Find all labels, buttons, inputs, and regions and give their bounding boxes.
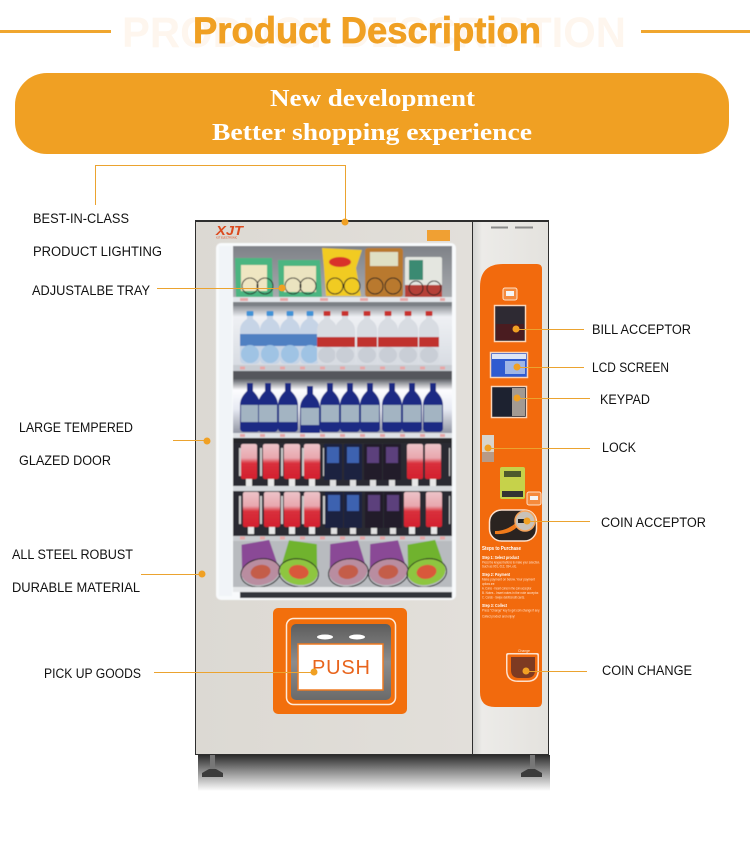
callout: tempered glass door xyxy=(19,420,210,468)
label: PICK UP GOODS xyxy=(44,666,141,681)
machine floor shadow xyxy=(198,755,550,791)
shelf tray 2 xyxy=(233,365,452,379)
label: BEST-IN-CLASS xyxy=(33,211,129,226)
callout: best-in-class lighting xyxy=(33,166,348,259)
shelf row 4: cans xyxy=(233,443,452,487)
machine foot right xyxy=(521,755,542,777)
callout: pick up goods xyxy=(44,666,318,681)
step 1: Step 1: Select product xyxy=(482,555,519,560)
coin acceptor xyxy=(490,510,536,541)
label: COIN ACCEPTOR xyxy=(601,515,706,530)
shelf row 6: noodle cups xyxy=(233,539,452,590)
step 2 xyxy=(482,572,539,600)
heading: watermark: PRODUCT DESCRIPTION xyxy=(122,9,626,57)
banner xyxy=(15,73,729,154)
step 1 xyxy=(482,555,540,568)
logo: XJT xyxy=(215,223,244,238)
pickup lights xyxy=(317,634,365,640)
label: COIN CHANGE xyxy=(602,663,692,678)
push flap xyxy=(298,644,383,690)
step 2: Step 2: Payment xyxy=(482,572,511,577)
warning sticker xyxy=(427,230,450,241)
label: BILL ACCEPTOR xyxy=(592,322,691,337)
side panel xyxy=(473,222,548,754)
shelf row 2: water bottles xyxy=(233,306,452,366)
callout: steel material xyxy=(12,547,206,595)
step 3: Collect product and enjoy! xyxy=(482,614,515,618)
keypad xyxy=(492,386,526,418)
callout: bill acceptor xyxy=(512,322,691,337)
label: ADJUSTALBE TRAY xyxy=(32,283,150,298)
title rule right xyxy=(641,30,750,33)
label: KEYPAD xyxy=(600,392,650,407)
title: Product Description xyxy=(193,10,541,51)
lock sticker xyxy=(482,435,494,462)
shelf row 5: cans xyxy=(233,491,452,536)
logo: XJT ELECTRONIC xyxy=(216,236,237,240)
step 1: Such as 001, 012, 034, etc. xyxy=(482,564,517,568)
door panel xyxy=(196,222,472,754)
bill acceptor xyxy=(494,306,526,342)
label: ALL STEEL ROBUST xyxy=(12,547,133,562)
coin icon xyxy=(527,492,541,505)
side vents xyxy=(491,226,533,228)
bottom tray xyxy=(233,587,452,598)
shelf tray 3 xyxy=(233,433,452,443)
label: LCD SCREEN xyxy=(592,360,669,375)
step 3: Step 3: Collect xyxy=(482,603,508,608)
label: LOCK xyxy=(602,440,636,455)
shelf tray 5 xyxy=(233,536,452,541)
callout: coin acceptor xyxy=(524,515,706,530)
vending machine xyxy=(195,220,549,755)
step 2: B. Notes - Insert notes in the note acceptor. xyxy=(482,591,539,595)
step 2: options are: xyxy=(482,582,495,586)
orange control panel xyxy=(480,264,542,707)
lcd screen xyxy=(490,352,528,378)
step 2: Make payment on below. Your payment xyxy=(482,578,535,582)
label: PRODUCT LIGHTING xyxy=(33,244,162,259)
pickup door xyxy=(273,608,407,714)
label: DURABLE MATERIAL xyxy=(12,580,140,595)
callout: coin change xyxy=(522,663,692,678)
callout: keypad xyxy=(514,392,650,407)
purchase steps: Steps to Purchase xyxy=(482,546,521,552)
step 3: Press "Change" key to get coin change if any. xyxy=(482,608,540,612)
pickup bezel xyxy=(291,624,391,700)
shelf row 3: blue bottles xyxy=(233,379,452,435)
machine foot left xyxy=(202,755,223,777)
label: GLAZED DOOR xyxy=(19,453,111,468)
step 2: A. Coins - Insert coins in the coin acceptor. xyxy=(482,586,532,590)
note icon xyxy=(503,288,517,300)
card reader xyxy=(500,467,525,499)
push text: PUSH xyxy=(312,657,370,679)
callout: lock xyxy=(484,440,636,455)
banner line 1: New development xyxy=(270,86,475,112)
shelf row 1: snacks xyxy=(233,246,452,299)
title rule left xyxy=(0,30,111,33)
callout: lcd screen xyxy=(514,360,669,375)
shelf tray 4 xyxy=(233,486,452,491)
callout: adjustable tray xyxy=(32,283,286,298)
banner line 2: Better shopping experience xyxy=(212,120,532,146)
glass door window xyxy=(216,243,456,600)
coin change tray xyxy=(506,653,539,682)
step 3 xyxy=(482,603,540,618)
step 2: C. Cards - Swipe debit/credit cards. xyxy=(482,596,525,600)
step 1: Press the keypad buttons to make your selection. xyxy=(482,560,540,564)
label: LARGE TEMPERED xyxy=(19,420,133,435)
purchase steps xyxy=(482,546,540,618)
change label: Change xyxy=(518,649,530,653)
shelf tray 1 xyxy=(233,297,452,306)
